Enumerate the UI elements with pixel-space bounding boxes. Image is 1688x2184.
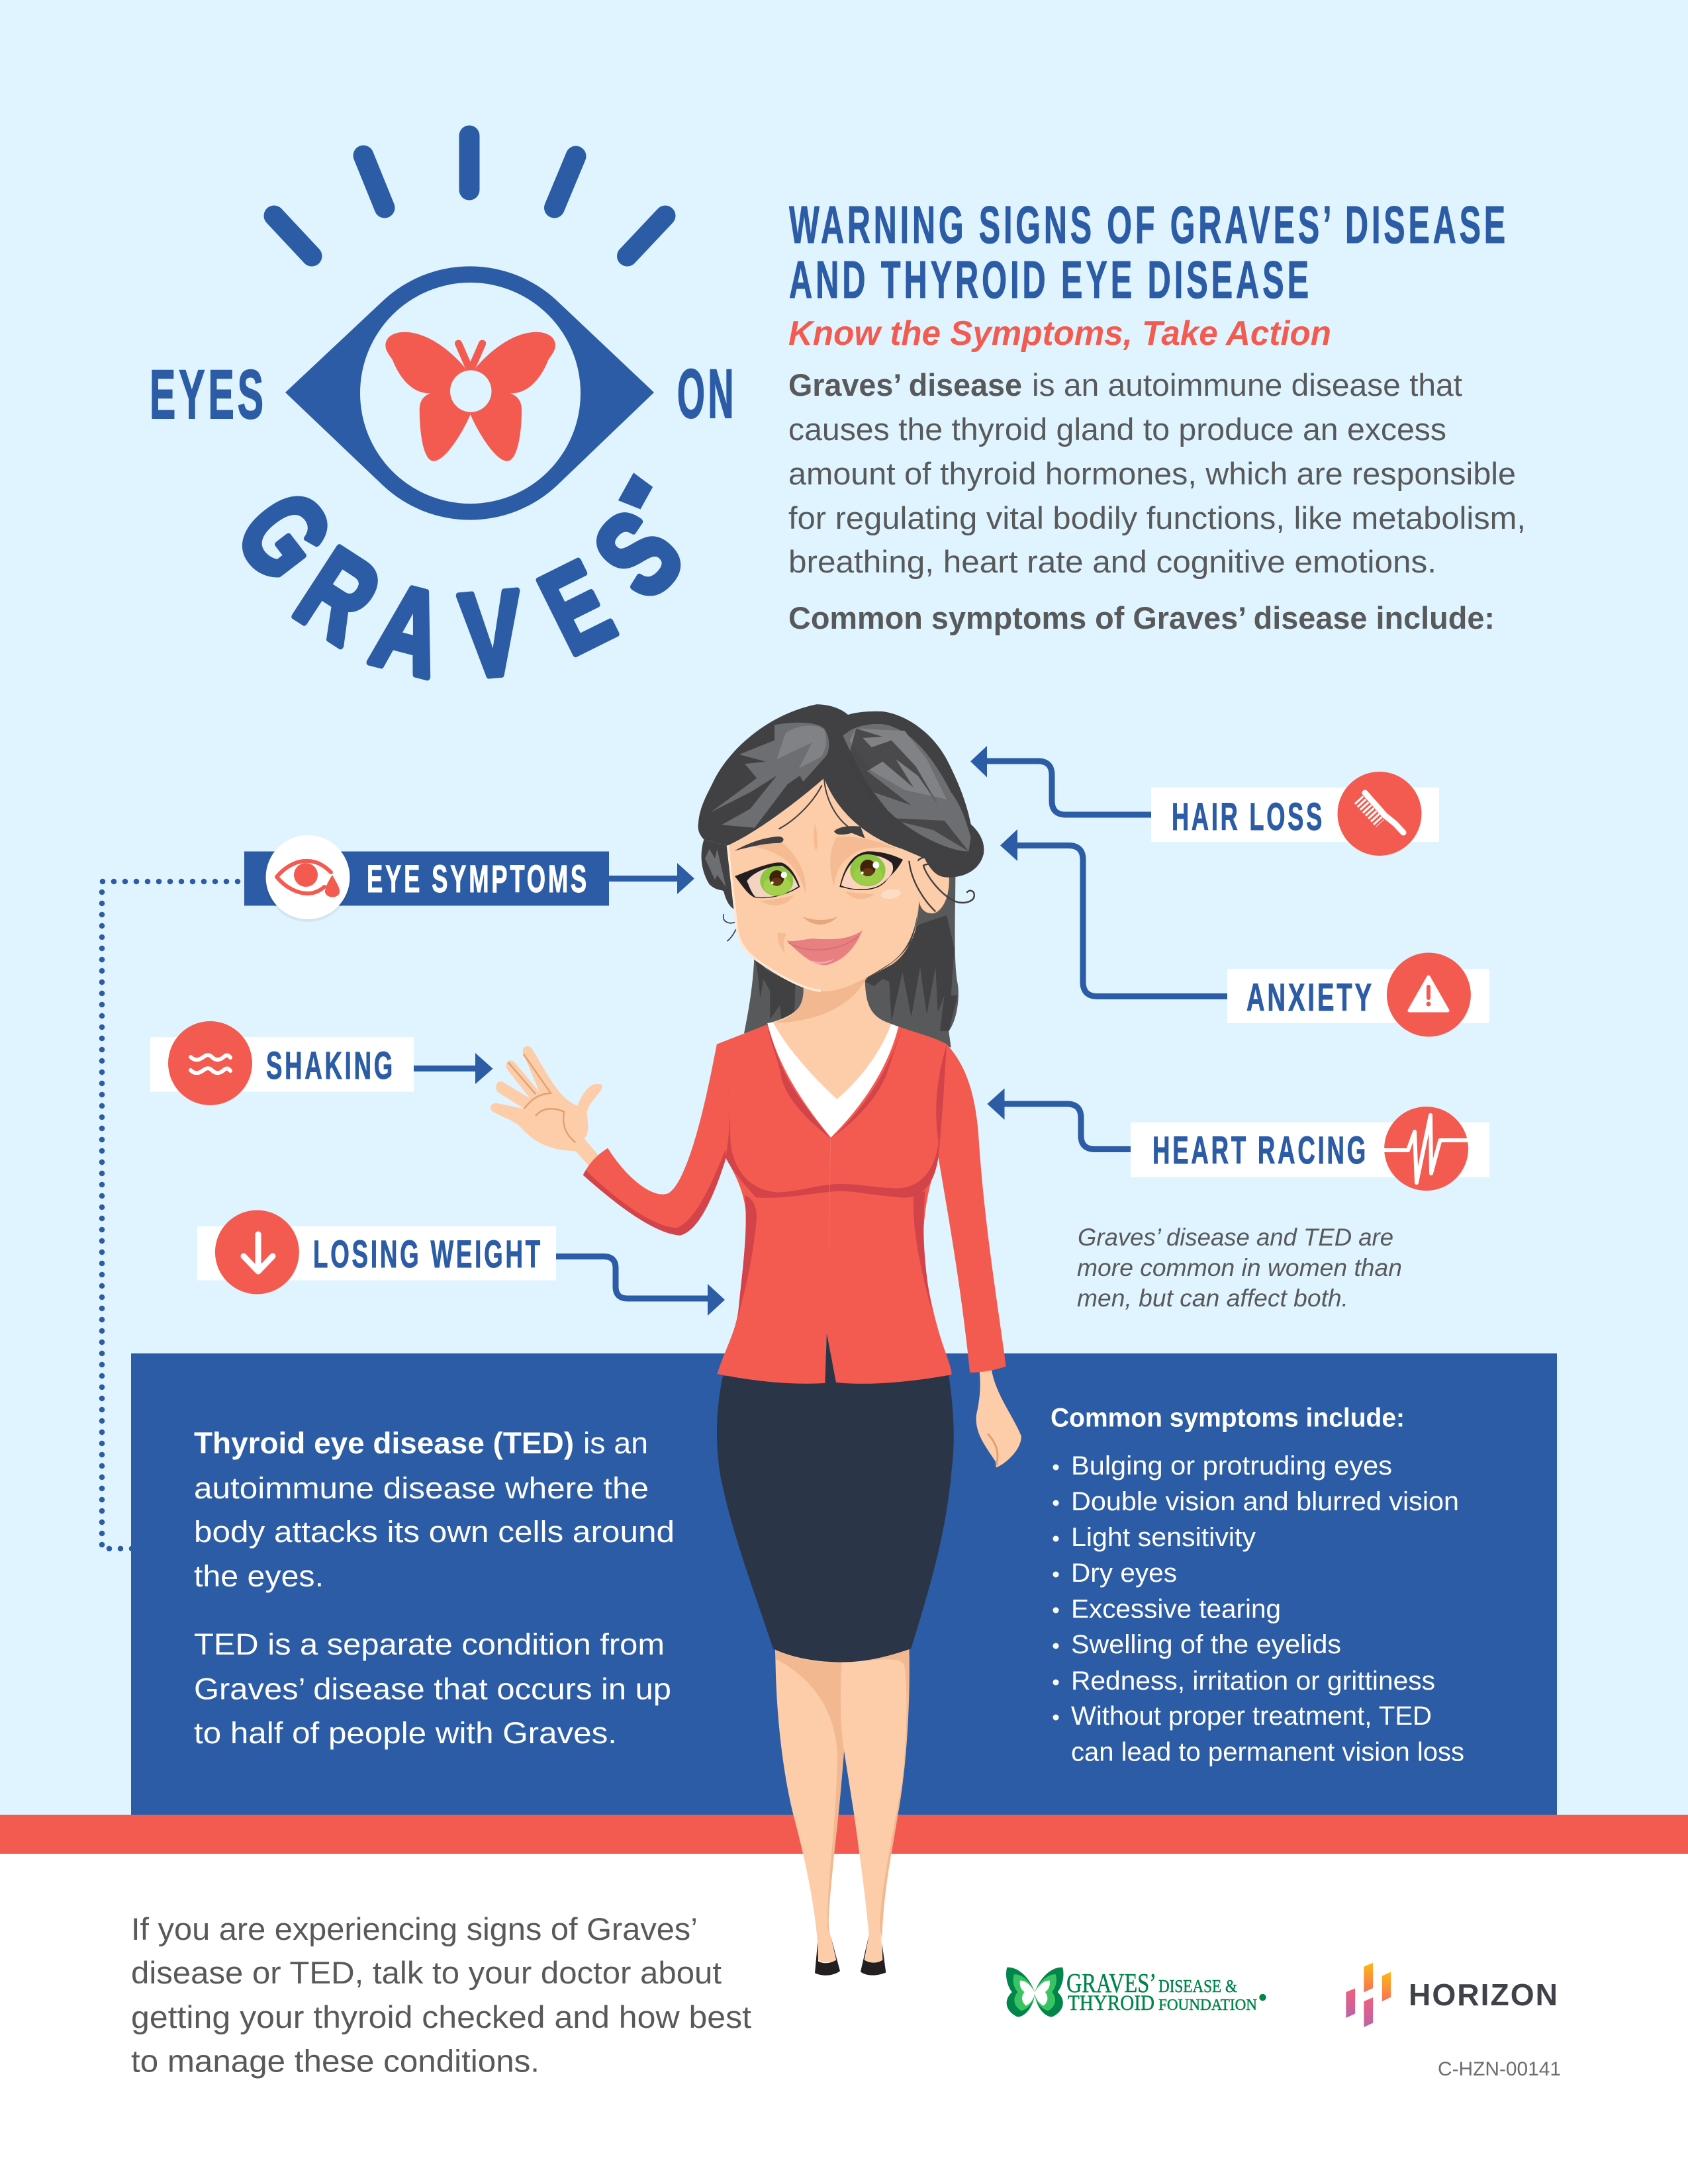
label: shaking (150, 1021, 414, 1105)
coral band (0, 1815, 1688, 1854)
face (727, 778, 919, 991)
hair loss bar (1151, 788, 1439, 842)
text: TED description: body attacks its own cells around (194, 1515, 675, 1549)
skirt (717, 1375, 954, 1662)
note: more common in women: Graves’ disease and TED are (1078, 1224, 1393, 1251)
logo eye outline (285, 266, 654, 520)
left eye (735, 862, 800, 898)
foundation name: GRAVES’ (1066, 1968, 1156, 1998)
text: TED description: the eyes. (194, 1559, 324, 1593)
text: TED description: autoimmune disease where the (194, 1471, 649, 1505)
jacket body (717, 1024, 952, 1384)
logo word: GRAVES' on a curve (211, 452, 715, 703)
intro paragraph: is an autoimmune disease that (1032, 367, 1462, 402)
logo word: GRAVES' on a curve: G (211, 469, 357, 602)
text: TED common symptoms list (1051, 1403, 1464, 1767)
common symptoms lead-in: Common symptoms of Graves’ disease include: (788, 600, 1495, 635)
icon: eye with tear (265, 835, 351, 922)
arrow: heart racing to chest (987, 1088, 1131, 1149)
text: TED common symptoms list: Double vision and blurred vision (1071, 1487, 1459, 1516)
text: TED common symptoms list: Without proper treatment, TED (1071, 1702, 1432, 1731)
arrow: losing weight to waist (556, 1256, 725, 1316)
arrow: shaking to hand (414, 1053, 492, 1084)
label: anxiety (1227, 953, 1489, 1036)
text: TED common symptoms list: Excessive tearing (1071, 1595, 1281, 1624)
arrow: hair loss to hair (970, 746, 1151, 815)
text: TED common symptoms list: Light sensitivity (1071, 1523, 1256, 1552)
shaking text: SHAKING (266, 1044, 395, 1087)
logo butterfly (385, 332, 555, 461)
right sleeve (939, 1044, 1006, 1373)
background: white footer (0, 1854, 1688, 2184)
anxiety bar (1227, 969, 1489, 1023)
logo word: ON: ON (677, 355, 737, 433)
intro paragraph: amount of thyroid hormones, which are responsible (788, 456, 1516, 491)
logo word: GRAVES' on a curve: ' (594, 452, 715, 553)
text: TED description (194, 1426, 675, 1750)
ear (900, 846, 949, 913)
cheek (880, 887, 901, 900)
dotted connector from eye symptoms to TED panel (102, 882, 238, 1549)
text: TED common symptoms list: Dry eyes (1071, 1559, 1177, 1588)
foundation name: DISEASE & (1158, 1976, 1237, 1996)
Horizon mark (1346, 1963, 1391, 2027)
icon: heartbeat line (1384, 1107, 1468, 1191)
logo rays (274, 136, 665, 256)
Horizon wordmark: HORIZON (1409, 1978, 1559, 2012)
text: TED common symptoms list: Swelling of the eyelids (1071, 1630, 1341, 1659)
panel: thyroid eye disease blue block (131, 1353, 1557, 1815)
note: more common in women: men, but can affect both. (1077, 1285, 1348, 1312)
legs and shoes (775, 1649, 910, 1976)
eyebrows (734, 826, 865, 851)
hair highlight left (710, 723, 829, 828)
illustration: woman (491, 704, 1021, 1976)
text: TED common symptoms list: Common symptoms include: (1051, 1403, 1405, 1432)
back hair (744, 873, 959, 1048)
icon: comb (1337, 772, 1422, 856)
logo: Graves' Disease and Thyroid Foundation (1006, 1968, 1266, 2017)
intro paragraph: for regulating vital bodily functions, like metabolism, (788, 500, 1526, 535)
note: more common in women: more common in women than (1077, 1254, 1402, 1281)
footer call to action: disease or TED, talk to your doctor about (131, 1955, 722, 1990)
logo word: GRAVES' on a curve: S (569, 486, 707, 621)
facial shading (755, 823, 898, 954)
logo: Horizon (1346, 1963, 1559, 2027)
footer call to action: to manage these conditions. (131, 2044, 539, 2078)
footer call to action: If you are experiencing signs of Graves’ (131, 1911, 698, 1946)
eye symptoms text: EYE SYMPTOMS (367, 858, 589, 901)
white collar (767, 1023, 898, 1138)
logo word: GRAVES' on a curve: V (455, 565, 528, 703)
hair highlight right (843, 724, 971, 851)
right eye (839, 851, 903, 890)
icon: down arrow (215, 1210, 299, 1295)
neck (766, 977, 909, 1105)
footer call to action (131, 1911, 751, 2078)
dark hair strands (847, 729, 968, 851)
text: TED common symptoms list: Bulging or protruding eyes (1071, 1451, 1392, 1480)
text: TED description: to half of people with Graves. (194, 1716, 617, 1750)
label: heart racing (1131, 1107, 1489, 1191)
front hair (698, 704, 984, 878)
hair loss text: HAIR LOSS (1172, 796, 1325, 839)
heading (789, 195, 1509, 309)
logo word: EYES: EYES (150, 356, 267, 433)
heading: AND THYROID EYE DISEASE (789, 250, 1312, 309)
heart racing bar (1131, 1122, 1489, 1177)
intro paragraph: causes the thyroid gland to produce an excess (788, 412, 1446, 447)
eye symptoms bar (244, 851, 609, 905)
label: hair loss (1151, 772, 1439, 856)
footer call to action: getting your thyroid checked and how best (131, 1999, 751, 2034)
shaking bar (150, 1037, 414, 1092)
logo word: GRAVES' on a curve: E (522, 535, 631, 679)
label: eye symptoms (244, 835, 609, 922)
losing weight bar (197, 1226, 556, 1280)
text: TED common symptoms list: can lead to permanent vision loss (1071, 1738, 1464, 1767)
text: TED description: is an (583, 1426, 648, 1460)
logo word: GRAVES' on a curve: A (361, 557, 457, 702)
label: losing weight (197, 1210, 556, 1295)
icon: warning triangle (1387, 953, 1471, 1036)
intro paragraph (788, 367, 1526, 579)
subtitle: Know the Symptoms, Take Action (788, 314, 1331, 353)
head (698, 704, 984, 991)
text: TED common symptoms list: Redness, irritation or grittiness (1071, 1666, 1435, 1696)
logo: Eyes on Graves' (150, 136, 737, 703)
intro paragraph: Graves’ disease (788, 367, 1022, 402)
arrow: anxiety to head (1000, 829, 1227, 997)
left sleeve (583, 1044, 733, 1236)
foundation name: FOUNDATION (1158, 1997, 1257, 2014)
document code: C-HZN-00141 (1438, 2058, 1561, 2080)
text: TED description: Graves’ disease that occurs in up (194, 1672, 671, 1706)
waving hand (491, 1046, 602, 1165)
arrow: eye symptoms to head (609, 863, 694, 894)
lower hand (976, 1370, 1021, 1467)
green butterfly mark (1006, 1968, 1063, 2017)
skirt, jacket and hands (491, 1023, 1021, 1662)
jacket shading (726, 1024, 947, 1318)
anxiety text: ANXIETY (1246, 976, 1374, 1019)
foundation name: THYROID (1068, 1991, 1154, 2015)
icon: shaking waves (168, 1021, 252, 1105)
text: TED description: Thyroid eye disease (TED) (194, 1426, 574, 1460)
heart racing text: HEART RACING (1152, 1129, 1368, 1172)
text: TED description: TED is a separate condition from (194, 1627, 665, 1661)
jacket slit (825, 1332, 836, 1384)
intro paragraph: breathing, heart rate and cognitive emotions. (788, 544, 1436, 579)
lower left hair (702, 840, 735, 909)
logo word: GRAVES' on a curve: R (275, 522, 401, 669)
foundation name (1066, 1968, 1266, 2015)
jacket centre seam (829, 1138, 831, 1246)
mouth (786, 931, 863, 965)
nose (802, 917, 838, 925)
note: more common in women (1077, 1224, 1402, 1312)
losing weight text: LOSING WEIGHT (313, 1233, 543, 1276)
